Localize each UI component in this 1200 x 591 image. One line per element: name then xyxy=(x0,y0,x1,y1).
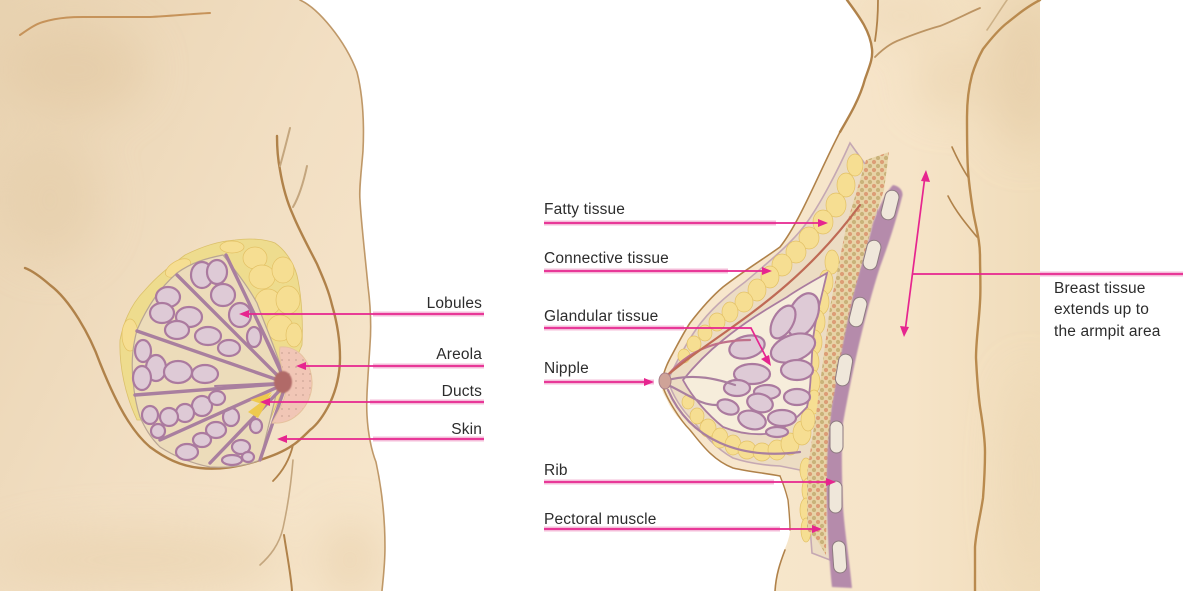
ducts and connective tissue xyxy=(664,205,860,454)
breast cross-section, side view xyxy=(659,143,903,588)
panel: side view of the body xyxy=(659,0,1060,591)
label: Nipple: Nipple xyxy=(544,360,589,377)
ducts xyxy=(135,255,284,463)
body contour lines, side view xyxy=(662,0,1040,591)
label: Glandular tissue: Glandular tissue xyxy=(544,308,658,325)
label: Lobules xyxy=(239,295,484,318)
fatty lobes, upper outer xyxy=(122,241,302,351)
outer skin layer xyxy=(668,143,878,560)
label: Connective tissue: Connective tissue xyxy=(544,250,669,267)
lobules xyxy=(715,288,825,437)
label: Areola xyxy=(296,346,484,370)
label: Areola: Areola xyxy=(436,346,482,363)
yellow wedges near the nipple xyxy=(248,392,272,418)
label: Breast tissue extends up to the armpit area: the armpit area xyxy=(1054,323,1161,340)
label: Pectoral muscle xyxy=(544,511,822,533)
body silhouette, front view xyxy=(0,0,385,591)
text: breast tissue note: Breast tissue xyxy=(1054,280,1146,297)
fatty tissue band xyxy=(678,154,863,542)
glandular area xyxy=(132,255,282,467)
label: Breast tissue extends up to the armpit area xyxy=(900,170,1183,340)
lobules xyxy=(133,260,262,465)
panel: front view of the body xyxy=(0,0,385,591)
label: Skin xyxy=(277,421,484,443)
double arrow: breast tissue extent xyxy=(900,170,930,337)
label: Fatty tissue xyxy=(544,201,828,227)
glandular cream area xyxy=(683,273,827,434)
fatty tissue ring xyxy=(120,239,302,420)
body contour lines, front view xyxy=(20,0,385,591)
areola xyxy=(272,347,312,423)
skin shading, front view xyxy=(32,41,383,591)
label: Nipple xyxy=(544,360,654,386)
label: Fatty tissue: Fatty tissue xyxy=(544,201,625,218)
glandular dotted column xyxy=(807,152,889,555)
skin shading, side view xyxy=(872,0,1040,134)
label: Lobules: Lobules xyxy=(427,295,482,312)
label: Glandular tissue xyxy=(544,308,771,366)
body silhouette, side view xyxy=(661,0,1040,591)
label: Ducts: Ducts xyxy=(442,383,482,400)
nipple xyxy=(274,371,292,393)
breast cross-section, front view xyxy=(120,239,312,467)
pectoral muscle and ribs xyxy=(827,185,903,588)
label: Ducts xyxy=(260,383,484,406)
label: Breast tissue extends up to the armpit area: extends up to xyxy=(1054,301,1149,318)
ribs xyxy=(829,189,900,573)
nipple xyxy=(659,373,671,389)
label: Skin: Skin xyxy=(451,421,482,438)
label: Pectoral muscle: Pectoral muscle xyxy=(544,511,657,528)
label: Connective tissue xyxy=(544,250,772,275)
label: Rib: Rib xyxy=(544,462,568,479)
label: Rib xyxy=(544,462,836,486)
